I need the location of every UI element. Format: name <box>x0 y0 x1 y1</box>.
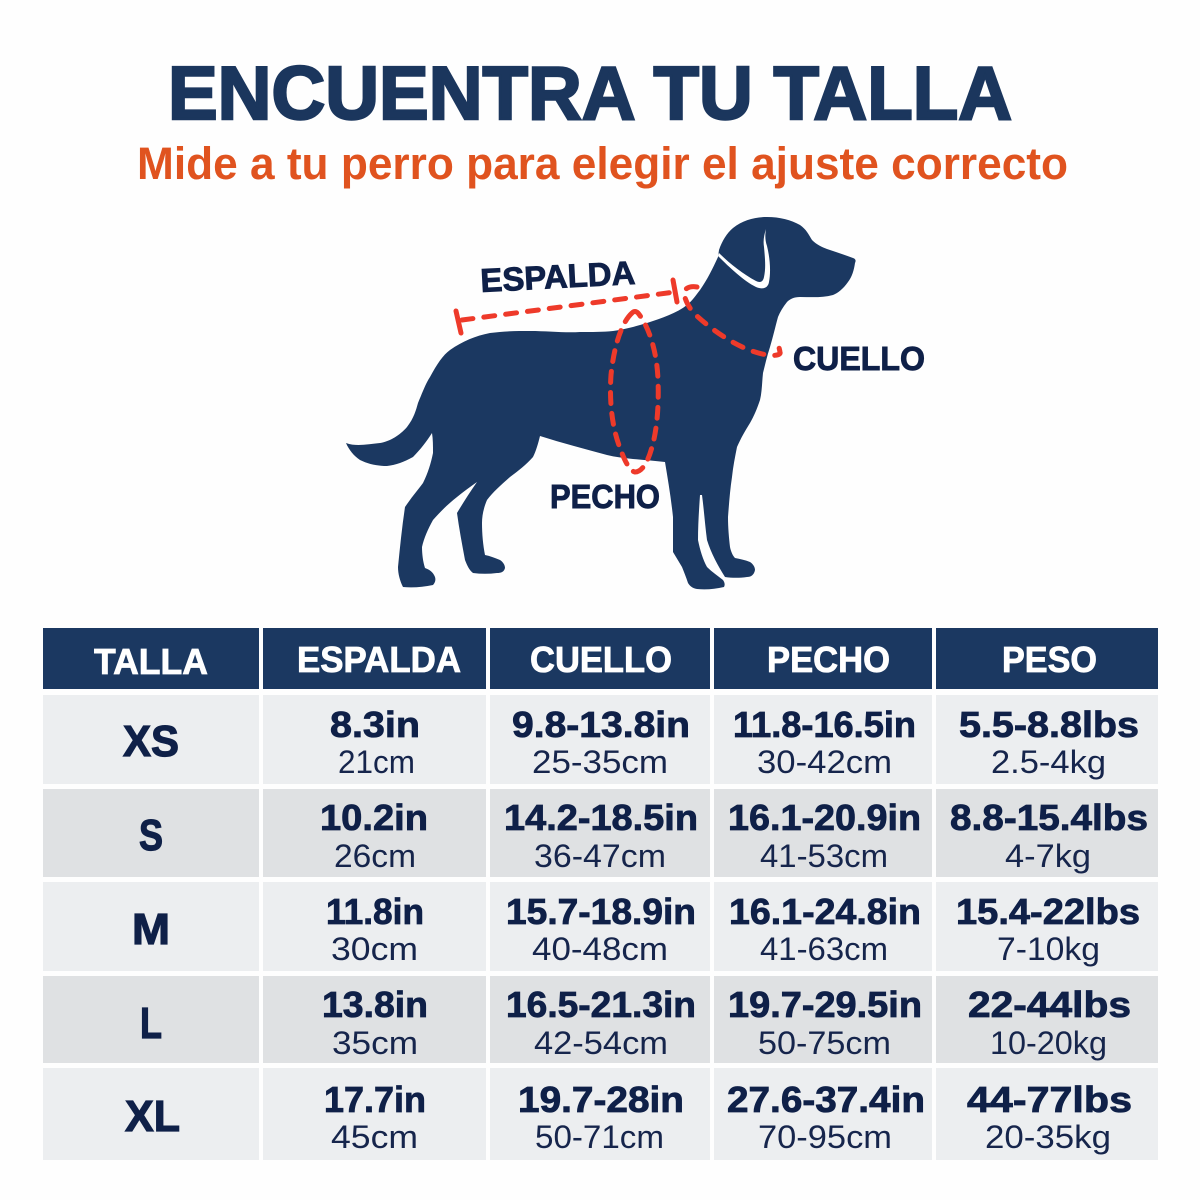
row XS: 21cm <box>338 744 415 780</box>
row S: S <box>139 811 163 860</box>
row M <box>43 882 1158 971</box>
row S <box>43 789 1158 877</box>
row S: 10.2in <box>320 797 428 838</box>
row S: 4-7kg <box>1005 838 1091 874</box>
row XS: 25-35cm <box>532 744 668 780</box>
table header row: PECHO <box>767 639 890 680</box>
table header row: CUELLO <box>530 639 672 680</box>
row XL: 19.7-28in <box>518 1079 684 1120</box>
row M: 30cm <box>331 931 418 967</box>
row XL: 17.7in <box>324 1079 426 1120</box>
row M: 11.8in <box>326 891 424 932</box>
row M: 15.4-22lbs <box>956 891 1140 932</box>
row XS: 9.8-13.8in <box>512 704 690 745</box>
dog measurement diagram <box>346 217 925 589</box>
row M: 16.1-24.8in <box>729 891 921 932</box>
subtitle: Mide a tu perro para elegir el ajuste correcto <box>137 138 1068 189</box>
row XL: 70-95cm <box>758 1119 892 1155</box>
table header row: PESO <box>1002 639 1097 680</box>
row XS: 2.5-4kg <box>991 744 1106 780</box>
row M: 41-63cm <box>760 931 888 967</box>
row XL: 44-77lbs <box>967 1079 1132 1120</box>
row XL: XL <box>125 1092 180 1141</box>
row L: 35cm <box>332 1025 418 1061</box>
row L: 16.5-21.3in <box>506 984 696 1025</box>
row L: 50-75cm <box>758 1025 891 1061</box>
row S: 36-47cm <box>534 838 666 874</box>
row L: 42-54cm <box>534 1025 668 1061</box>
row S: 16.1-20.9in <box>728 797 921 838</box>
row M: 40-48cm <box>532 931 668 967</box>
row XS <box>43 695 1158 784</box>
row L: L <box>140 999 162 1048</box>
size table <box>43 628 1158 1160</box>
row M: M <box>132 905 170 954</box>
row XL: 20-35kg <box>985 1119 1111 1155</box>
row XS: 11.8-16.5in <box>733 704 916 745</box>
row XL: 50-71cm <box>535 1119 664 1155</box>
row L: 19.7-29.5in <box>728 984 922 1025</box>
row XS: 30-42cm <box>757 744 892 780</box>
row XL: 45cm <box>331 1119 418 1155</box>
row L: 22-44lbs <box>968 984 1131 1025</box>
back measurement line <box>456 280 677 333</box>
table header row <box>43 628 1158 689</box>
dog ear outline <box>718 229 770 288</box>
label: cuello: CUELLO <box>793 340 925 377</box>
row S: 14.2-18.5in <box>504 797 698 838</box>
row XS: XS <box>123 717 179 766</box>
row S: 26cm <box>334 838 416 874</box>
row L <box>43 976 1158 1063</box>
row XL: 27.6-37.4in <box>727 1079 925 1120</box>
chest measurement loop <box>610 312 658 472</box>
table header row: TALLA <box>94 641 208 682</box>
row S: 8.8-15.4lbs <box>950 797 1148 838</box>
row XL <box>43 1068 1158 1160</box>
row M: 15.7-18.9in <box>506 891 696 932</box>
neck measurement line <box>684 287 780 355</box>
row L: 13.8in <box>322 984 428 1025</box>
row M: 7-10kg <box>997 931 1100 967</box>
label: pecho: PECHO <box>550 478 660 515</box>
title: ENCUENTRA TU TALLA <box>168 51 1012 135</box>
row XS: 5.5-8.8lbs <box>959 704 1139 745</box>
dog silhouette <box>346 217 856 589</box>
row L: 10-20kg <box>990 1025 1107 1061</box>
row XS: 8.3in <box>330 704 420 745</box>
row S: 41-53cm <box>760 838 888 874</box>
label: espalda: ESPALDA <box>479 254 636 299</box>
table header row: ESPALDA <box>297 639 461 680</box>
